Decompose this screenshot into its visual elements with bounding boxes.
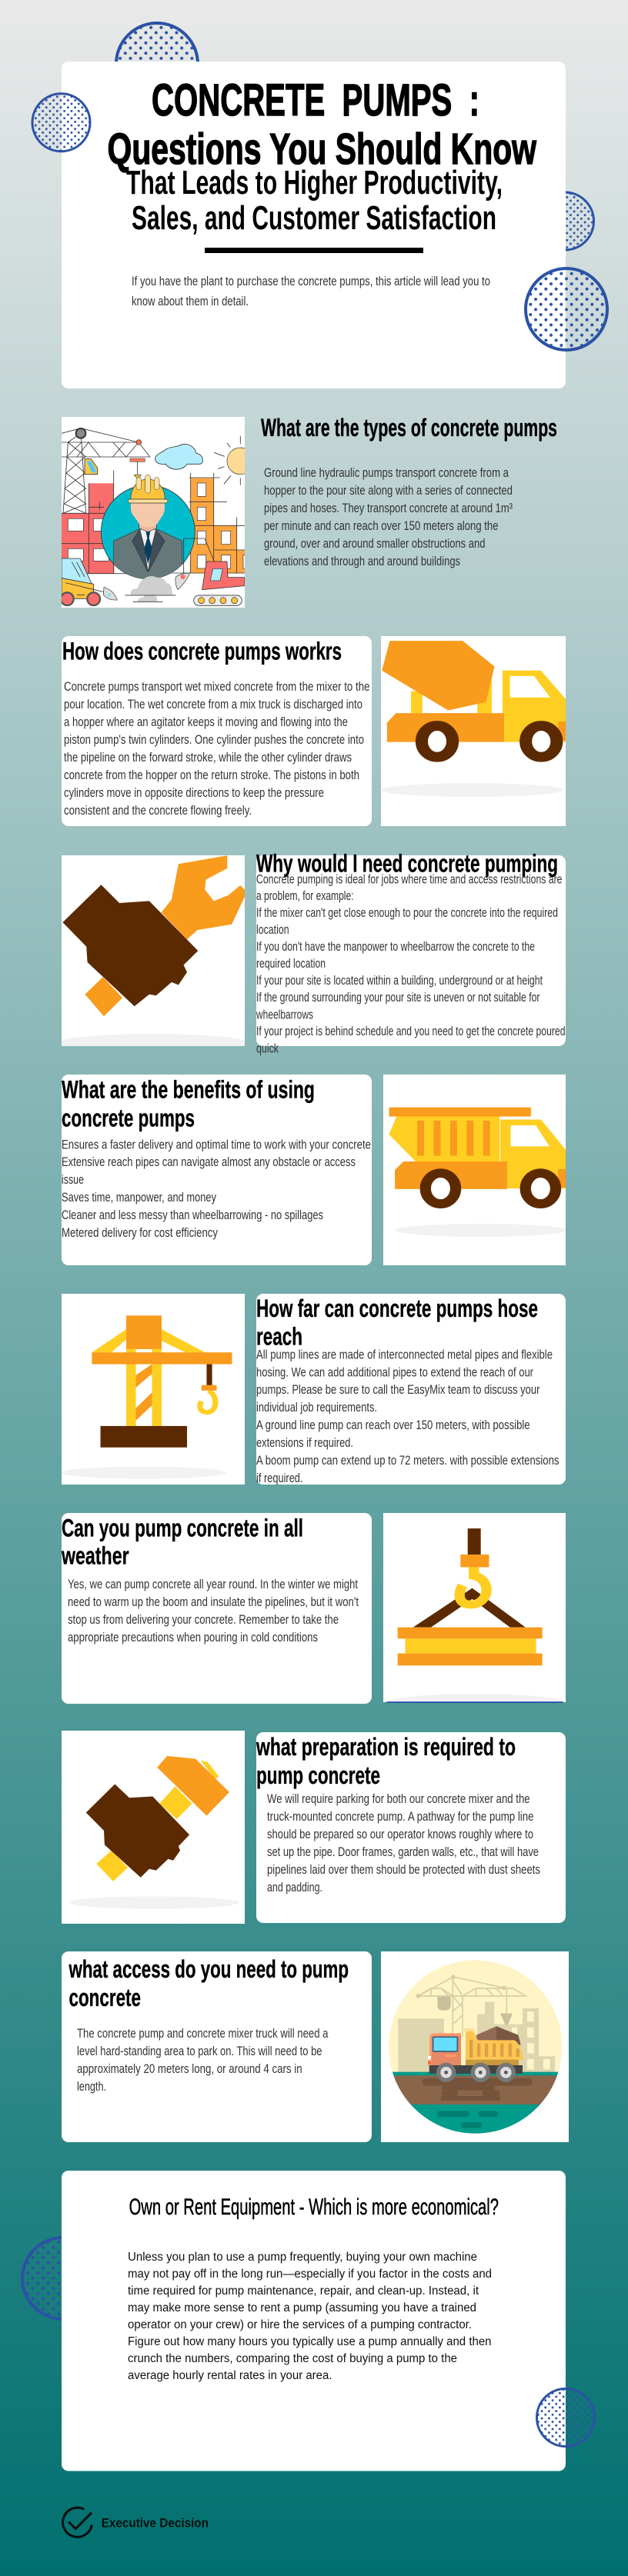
heading: pump concrete bbox=[256, 1761, 380, 1789]
panel: why concrete pumping bbox=[256, 850, 566, 1056]
decorative circle: right of hero bbox=[536, 192, 594, 250]
heading: concrete pumps bbox=[62, 1104, 195, 1131]
image: hand holding hammer bbox=[62, 1731, 245, 1924]
title: CONCRETE PUMPS : bbox=[152, 75, 479, 125]
body text: should be prepared so our operator knows roughly where to bbox=[267, 1828, 533, 1841]
body text: A ground line pump can reach over 150 meters, with possible bbox=[256, 1418, 530, 1432]
body text: The concrete pump and concrete mixer truck will need a bbox=[77, 2027, 329, 2041]
body text: length. bbox=[77, 2080, 106, 2094]
panel: own or rent bbox=[62, 2171, 566, 2471]
body text: pipelines laid over them should be protected with dust sheets bbox=[267, 1863, 540, 1877]
text: types of concrete pumps bbox=[264, 466, 513, 568]
image: crane hook with load bbox=[383, 1513, 566, 1711]
body text: Extensive reach pipes can navigate almost any obstacle or access bbox=[62, 1155, 356, 1169]
body text: Saves time, manpower, and money bbox=[62, 1191, 217, 1205]
body text: Concrete pumps transport wet mixed concrete from the mixer to the bbox=[64, 680, 369, 694]
body text: approximately 20 meters long, or around 4 cars in bbox=[77, 2062, 302, 2076]
body text: If the ground surrounding your pour site is uneven or not suitable for bbox=[256, 991, 540, 1005]
body text: If you don't have the manpower to wheelbarrow the concrete to the bbox=[256, 940, 535, 954]
intro text: If you have the plant to purchase the concrete pumps, this article will lead you to bbox=[132, 275, 490, 288]
body text: Figure out how many hours you typically use a pump annually and then bbox=[128, 2335, 491, 2348]
cloud bbox=[155, 444, 203, 469]
image: engineer at construction site bbox=[61, 417, 254, 608]
body text: the pipeline on the forward stroke, while the other cylinder draws bbox=[64, 751, 352, 765]
sun bbox=[214, 435, 245, 485]
body text: pour location. The wet concrete from a mix truck is discharged into bbox=[64, 698, 362, 711]
panel: benefits bbox=[62, 1075, 372, 1265]
heading: Can you pump concrete in all bbox=[62, 1514, 303, 1541]
body text: set up the pipe. Door frames, garden walls, etc., that will have bbox=[267, 1845, 539, 1859]
body text: appropriate precautions when pouring in cold conditions bbox=[68, 1631, 318, 1645]
body text: required location bbox=[256, 957, 326, 971]
truck bbox=[428, 2026, 523, 2082]
ground bbox=[381, 2072, 570, 2076]
engineer portrait bbox=[101, 475, 195, 579]
heading bbox=[61, 1514, 303, 1570]
panel: preparation bbox=[256, 1732, 566, 1923]
decorative circle: lower right of hero bbox=[526, 268, 607, 350]
body text bbox=[128, 2251, 492, 2382]
intro text bbox=[132, 275, 490, 308]
text: types of concrete pumps: pipes and hoses. They transport concrete at around 1m³ bbox=[264, 502, 513, 515]
red building bbox=[62, 471, 129, 574]
body text: piston pump's twin cylinders. One cylinder pushes the concrete into bbox=[64, 733, 364, 747]
decorative circle: top of hero bbox=[116, 23, 198, 105]
body text: time required for pump maintenance, repair, and clean-up. Instead, it bbox=[128, 2284, 479, 2298]
panel: hose reach bbox=[256, 1294, 566, 1485]
body text bbox=[62, 1138, 371, 1240]
logo: Executive Decision bbox=[63, 2508, 209, 2537]
heading: reach bbox=[256, 1323, 302, 1351]
heading: weather bbox=[61, 1542, 129, 1570]
body text: individual job requirements. bbox=[256, 1401, 377, 1415]
body text: concrete from the hopper on the return stroke. The pistons in both bbox=[64, 768, 359, 782]
body text: quick bbox=[256, 1042, 279, 1056]
body text: stop us from delivering your concrete. Remember to take the bbox=[68, 1613, 339, 1627]
image: dump truck at construction site bbox=[381, 1950, 570, 2142]
text: types of concrete pumps: hopper to the pour site along with a series of connected bbox=[264, 484, 513, 498]
site crane bbox=[416, 1975, 526, 2037]
heading: what access do you need to pump bbox=[68, 1955, 349, 1983]
body text: level hard-standing area to park on. This will need to be bbox=[77, 2044, 322, 2058]
body text: Yes, we can pump concrete all year round. In the winter we might bbox=[68, 1578, 358, 1591]
panel: hero bbox=[62, 62, 566, 388]
intro text: know about them in detail. bbox=[132, 295, 249, 308]
body text: Cleaner and less messy than wheelbarrowing - no spillages bbox=[62, 1208, 323, 1222]
text: types of concrete pumps: Ground line hydraulic pumps transport concrete from a bbox=[264, 466, 509, 480]
decorative circle: left of closing panel bbox=[22, 2238, 104, 2319]
image: tower crane bbox=[61, 1294, 245, 1485]
body text: extensions if required. bbox=[256, 1436, 353, 1450]
heading bbox=[256, 1733, 516, 1789]
image: dump truck bbox=[383, 1075, 569, 1265]
body text: issue bbox=[62, 1173, 84, 1187]
brand name: Executive Decision bbox=[102, 2516, 209, 2531]
body text bbox=[256, 872, 565, 1056]
body text: wheelbarrows bbox=[256, 1008, 313, 1021]
body text: average hourly rental rates in your area. bbox=[128, 2369, 332, 2382]
body text: may not pay off in the long run—especially if you factor in the costs and bbox=[128, 2268, 492, 2281]
image: hand holding wrench bbox=[62, 855, 245, 1046]
panel: all weather bbox=[61, 1513, 372, 1704]
heading: How does concrete pumps workrs bbox=[62, 637, 342, 665]
body text: and padding. bbox=[267, 1881, 322, 1895]
icon: check mark bbox=[63, 2508, 92, 2537]
tower crane bbox=[62, 428, 150, 513]
body text: pumps. Please be sure to call the EasyMix team to discuss your bbox=[256, 1383, 540, 1397]
body text bbox=[267, 1792, 540, 1895]
title rule bbox=[205, 248, 423, 253]
orange buildings bbox=[172, 473, 246, 573]
subtitle bbox=[126, 164, 503, 237]
body text: Metered delivery for cost efficiency bbox=[62, 1226, 219, 1240]
panel: access bbox=[62, 1951, 372, 2142]
body text: may make more sense to rent a pump (assuming you have a trained bbox=[128, 2301, 476, 2314]
heading bbox=[256, 1295, 538, 1351]
heading: what preparation is required to bbox=[256, 1733, 516, 1761]
loader and excavator bbox=[61, 538, 245, 605]
heading: What are the benefits of using bbox=[62, 1075, 315, 1103]
body text: truck-mounted concrete pump. A pathway for the pump line bbox=[267, 1810, 534, 1824]
heading: concrete bbox=[69, 1984, 141, 2011]
body text bbox=[68, 1578, 359, 1645]
body text: a problem, for example: bbox=[256, 889, 354, 903]
body text: Unless you plan to use a pump frequently, buying your own machine bbox=[128, 2251, 477, 2264]
body text: a hopper where an agitator keeps it moving and flowing into the bbox=[64, 715, 348, 729]
text: types of concrete pumps: elevations and through and around buildings bbox=[264, 555, 460, 568]
body text: need to warm up the boom and insulate the pipelines, but it won't bbox=[68, 1595, 359, 1609]
body text: A boom pump can extend up to 72 meters. with possible extensions bbox=[256, 1454, 559, 1468]
body text: location bbox=[256, 923, 289, 937]
body text: consistent and the concrete flowing freely. bbox=[64, 804, 252, 818]
body text: hosing. We can add additional pipes to extend the reach of our bbox=[256, 1365, 533, 1379]
body text: if required. bbox=[256, 1471, 303, 1485]
body text: Ensures a faster delivery and optimal time to work with your concrete bbox=[62, 1138, 371, 1151]
image: concrete mixer truck bbox=[381, 636, 569, 826]
body text: cylinders move in opposite directions to keep the pressure bbox=[64, 786, 324, 800]
title bbox=[108, 75, 536, 174]
text: types of concrete pumps: per minute and can reach over 150 meters along the bbox=[264, 519, 499, 533]
body text: All pump lines are made of interconnected metal pipes and flexible bbox=[256, 1348, 553, 1361]
text: types of concrete pumps: ground, over and around smaller obstructions and bbox=[264, 537, 485, 551]
body text: operator on your crew) or hire the services of a pumping contractor. bbox=[128, 2318, 472, 2331]
body text bbox=[256, 1348, 559, 1485]
decorative circle: right of closing panel bbox=[537, 2389, 594, 2446]
body text: crunch the numbers, comparing the cost of buying a pump to the bbox=[128, 2352, 457, 2365]
body text bbox=[64, 680, 369, 818]
decorative circle: left of hero bbox=[32, 94, 90, 152]
body text: We will require parking for both our concrete mixer and the bbox=[267, 1792, 530, 1806]
site buildings bbox=[398, 2002, 555, 2073]
panel: how pumps work bbox=[62, 636, 372, 826]
heading bbox=[68, 1955, 349, 2011]
body text bbox=[77, 2027, 329, 2094]
heading bbox=[62, 1075, 315, 1131]
